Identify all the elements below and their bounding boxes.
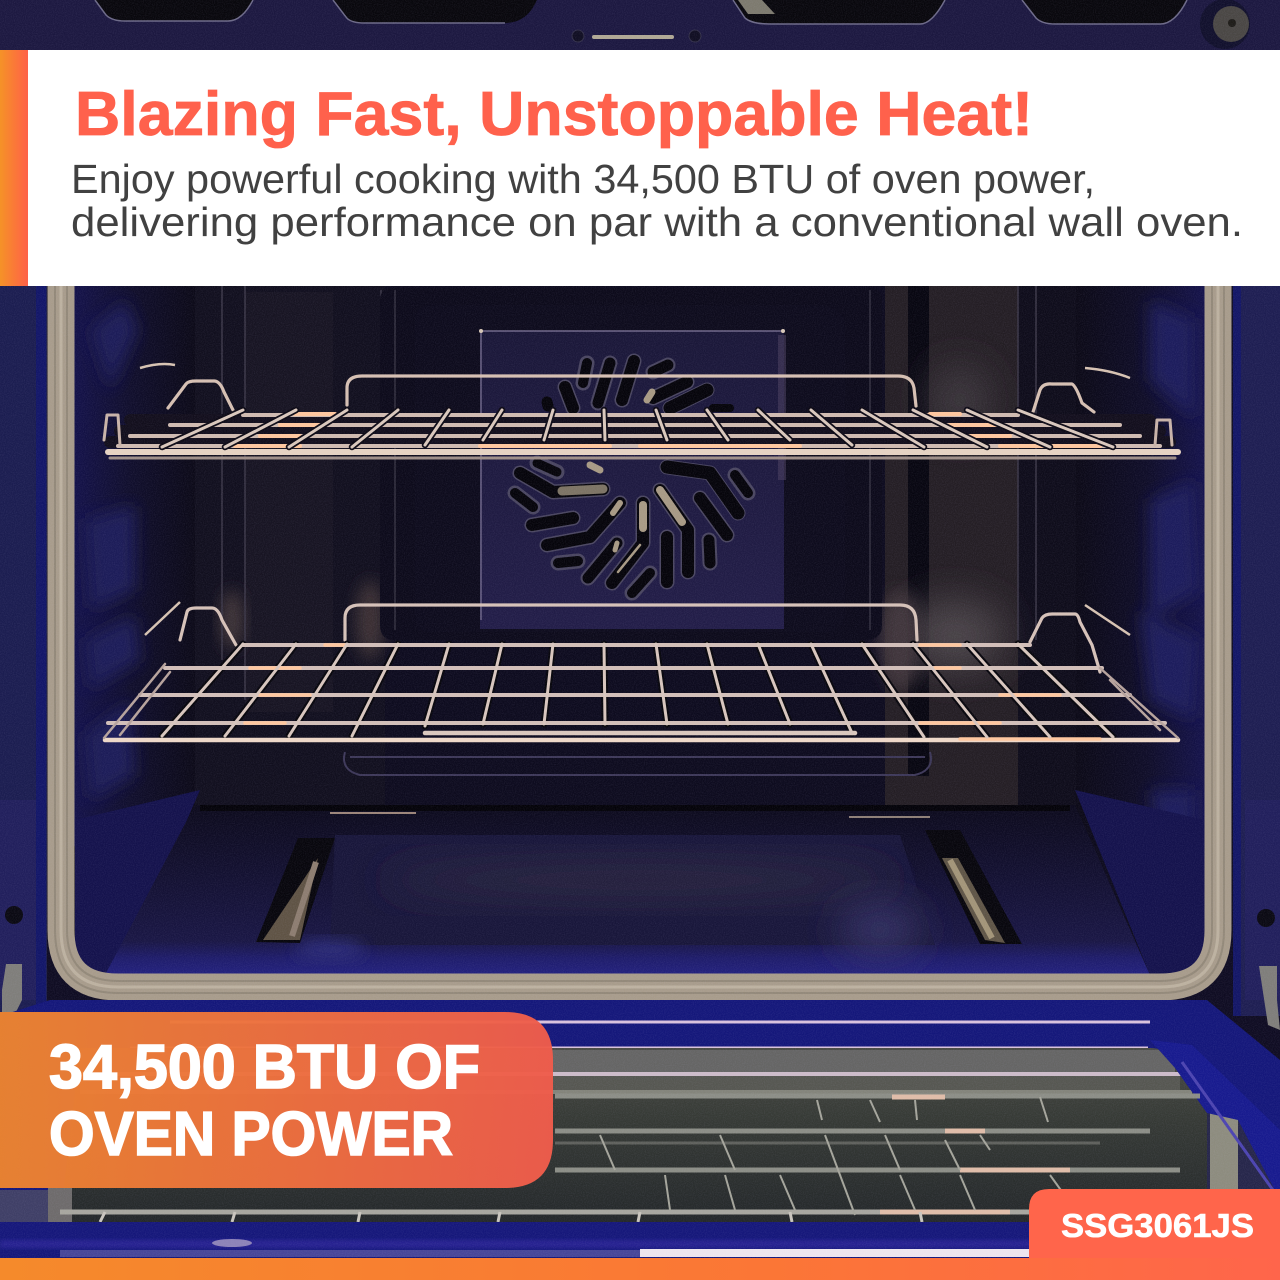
open oven door — [0, 1000, 1280, 1258]
description text: delivering performance on par with a conventional wall oven. — [71, 199, 1243, 245]
frame screws and hinges — [2, 906, 1280, 1030]
header panel — [0, 50, 1280, 286]
rear wall panel — [380, 288, 882, 640]
oven floor — [105, 752, 1150, 975]
upper oven rack — [104, 376, 1178, 458]
convection fan vent — [515, 361, 748, 593]
badge text: OVEN POWER — [49, 1100, 453, 1169]
left and right door frame — [0, 286, 1280, 1016]
side wall rack supports — [75, 300, 1205, 975]
accent bar — [0, 50, 28, 286]
door gasket — [55, 286, 1224, 993]
callout: 34,500 BTU badge — [0, 1012, 553, 1188]
model number tag — [1029, 1189, 1280, 1258]
header background — [28, 50, 1280, 286]
right broiler slot — [925, 830, 1022, 944]
left broiler slot — [256, 838, 335, 943]
upper rack guard rail and handles — [168, 376, 1094, 412]
lower oven rack — [104, 605, 1178, 740]
lower rack guard rail and handles — [180, 605, 1100, 672]
badge text: 34,500 BTU OF — [49, 1033, 480, 1102]
rack reflections in door glass — [60, 1096, 1200, 1222]
bottom accent band — [0, 1258, 1280, 1280]
model number text: SSG3061JS — [1061, 1207, 1254, 1244]
headline: Blazing Fast, Unstoppable Heat! — [75, 80, 1033, 149]
description text: Enjoy powerful cooking with 34,500 BTU of oven power, — [71, 156, 1095, 202]
door bottom trim — [0, 1222, 1280, 1258]
oven cavity — [74, 286, 1206, 986]
oven top trim strip — [0, 0, 1280, 52]
